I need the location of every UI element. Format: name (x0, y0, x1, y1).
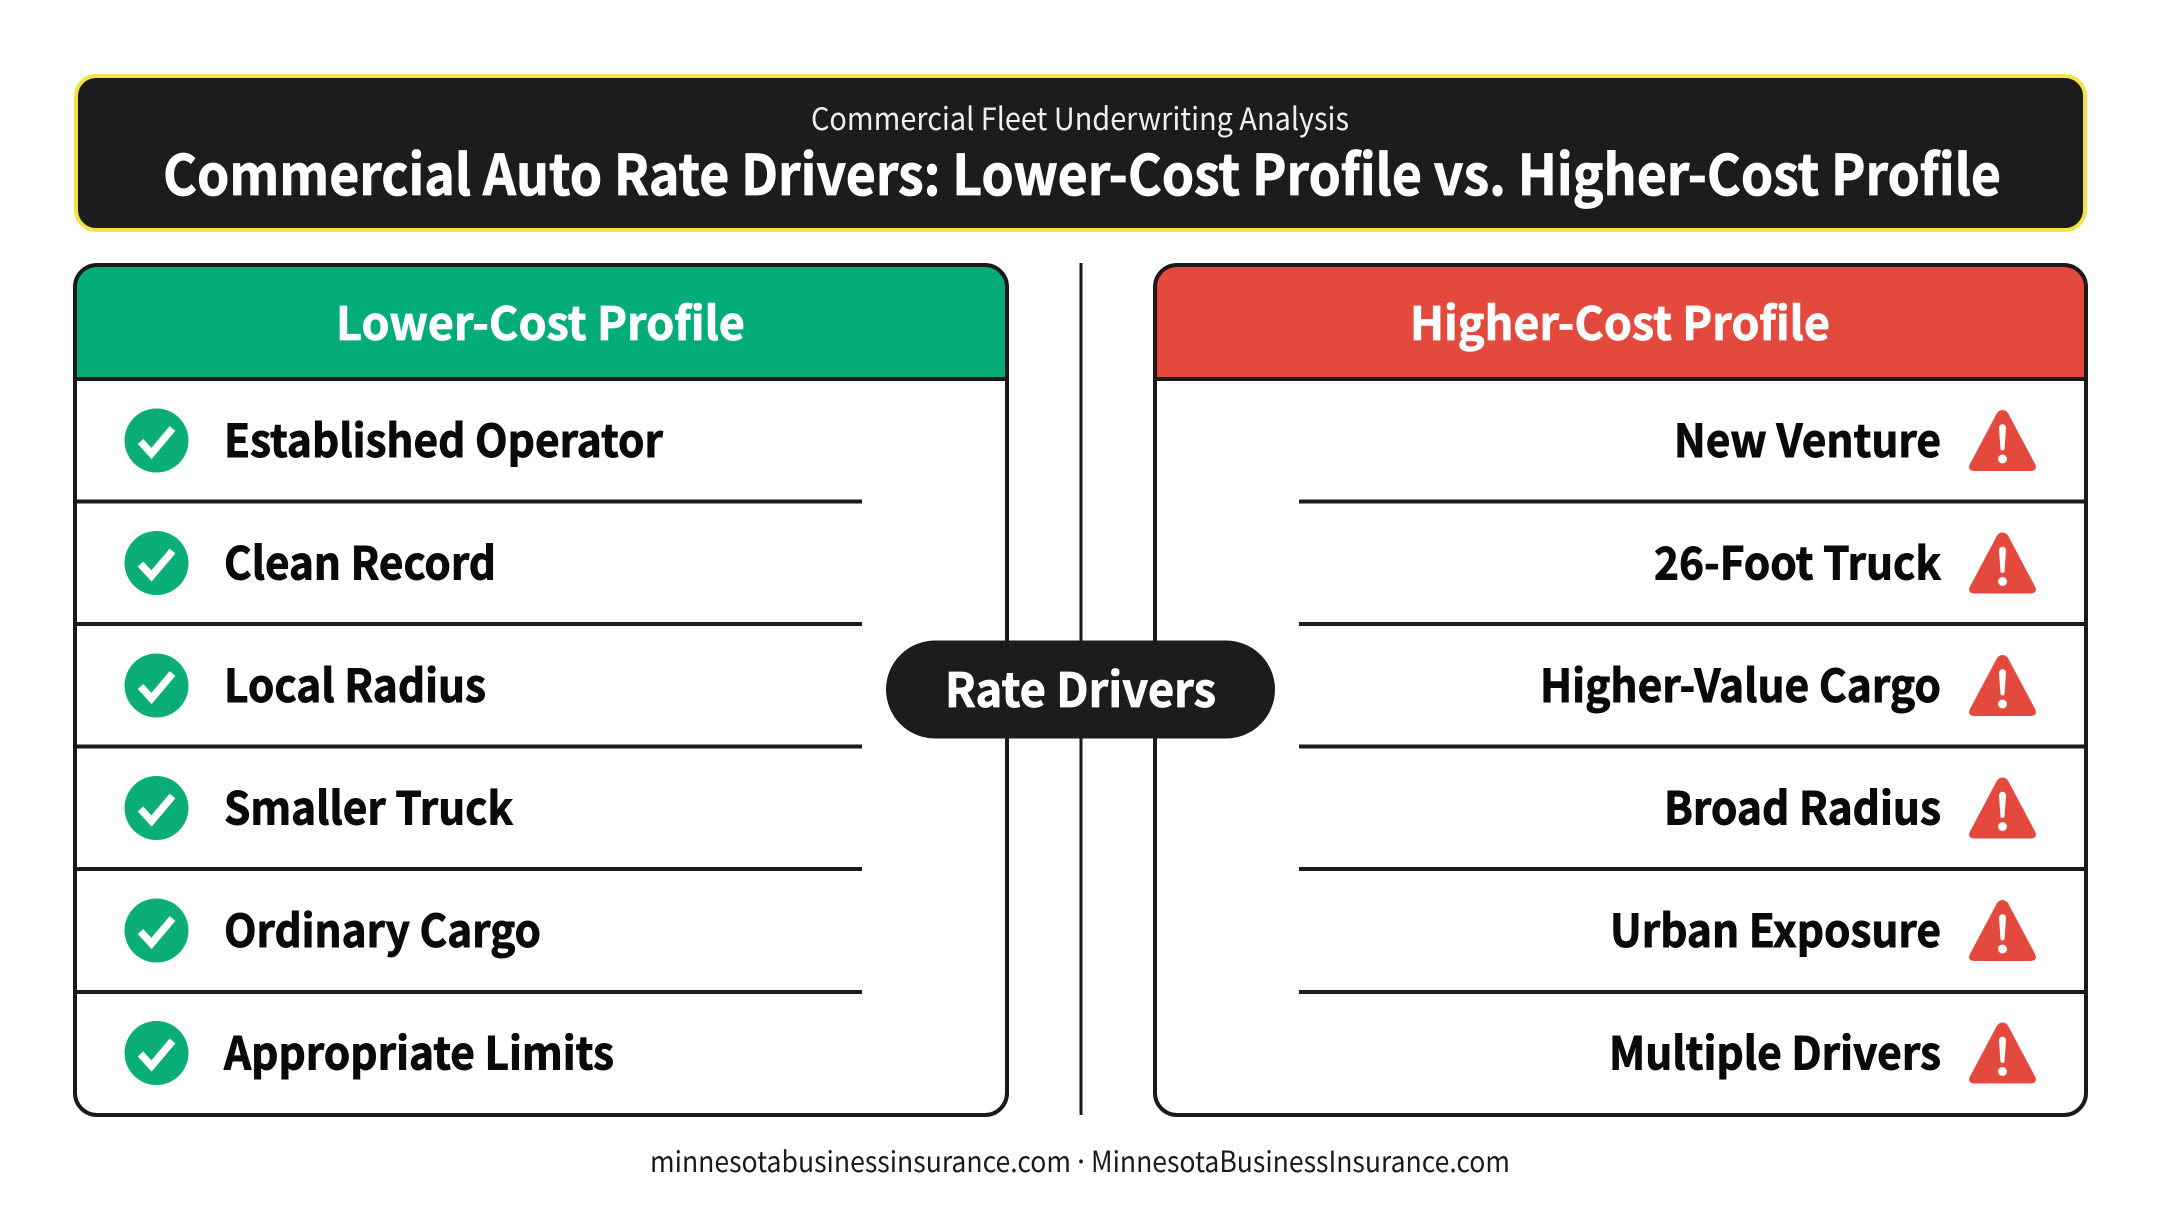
item: Smaller Truck: Smaller Truck (224, 772, 513, 838)
item: Ordinary Cargo: Ordinary Cargo (224, 895, 541, 960)
item: Clean Record: Clean Record (224, 528, 496, 592)
item: Higher-Value Cargo: Higher-Value Cargo (1540, 650, 1941, 715)
item: Established Operator: Established Operator (224, 405, 663, 470)
higher-cost header (1155, 265, 2086, 380)
item: Smaller Truck (124, 772, 513, 840)
item: Multiple Drivers: Multiple Drivers (1609, 1018, 1941, 1082)
center divider line (1080, 263, 1082, 1115)
item: Urban Exposure: Urban Exposure (1610, 895, 1941, 960)
subtitle: Commercial Fleet Underwriting Analysis (811, 94, 1349, 139)
center pill: Rate Drivers: Rate Drivers (945, 652, 1216, 721)
title banner (76, 76, 2085, 230)
item: Broad Radius: Broad Radius (1664, 772, 1941, 838)
panel: lower-cost profile (75, 265, 1007, 1115)
item: Local Radius (124, 650, 486, 718)
footer source text: MinnesotaBusinessInsurance.com (1091, 1139, 1510, 1181)
item: Local Radius: Local Radius (224, 650, 486, 715)
item: Ordinary Cargo (124, 895, 541, 962)
center pill: Rate Drivers (886, 640, 1275, 738)
lower-cost header (75, 265, 1007, 380)
item: Clean Record (124, 528, 496, 595)
higher-cost heading: Higher-Cost Profile (1410, 288, 1830, 354)
item: New Venture: New Venture (1674, 405, 1941, 470)
footer source text: minnesotabusinessinsurance.com (650, 1139, 1071, 1181)
item: Appropriate Limits: Appropriate Limits (223, 1018, 614, 1082)
lower-cost heading: Lower-Cost Profile (336, 288, 745, 354)
footer source text: · (1073, 1139, 1089, 1181)
item: 26-Foot Truck: 26-Foot Truck (1654, 528, 1941, 592)
title: Commercial Auto Rate Drivers: Lower-Cost Profile vs. Higher-Cost Profile (163, 131, 2001, 212)
panel: higher-cost profile (1155, 265, 2086, 1115)
